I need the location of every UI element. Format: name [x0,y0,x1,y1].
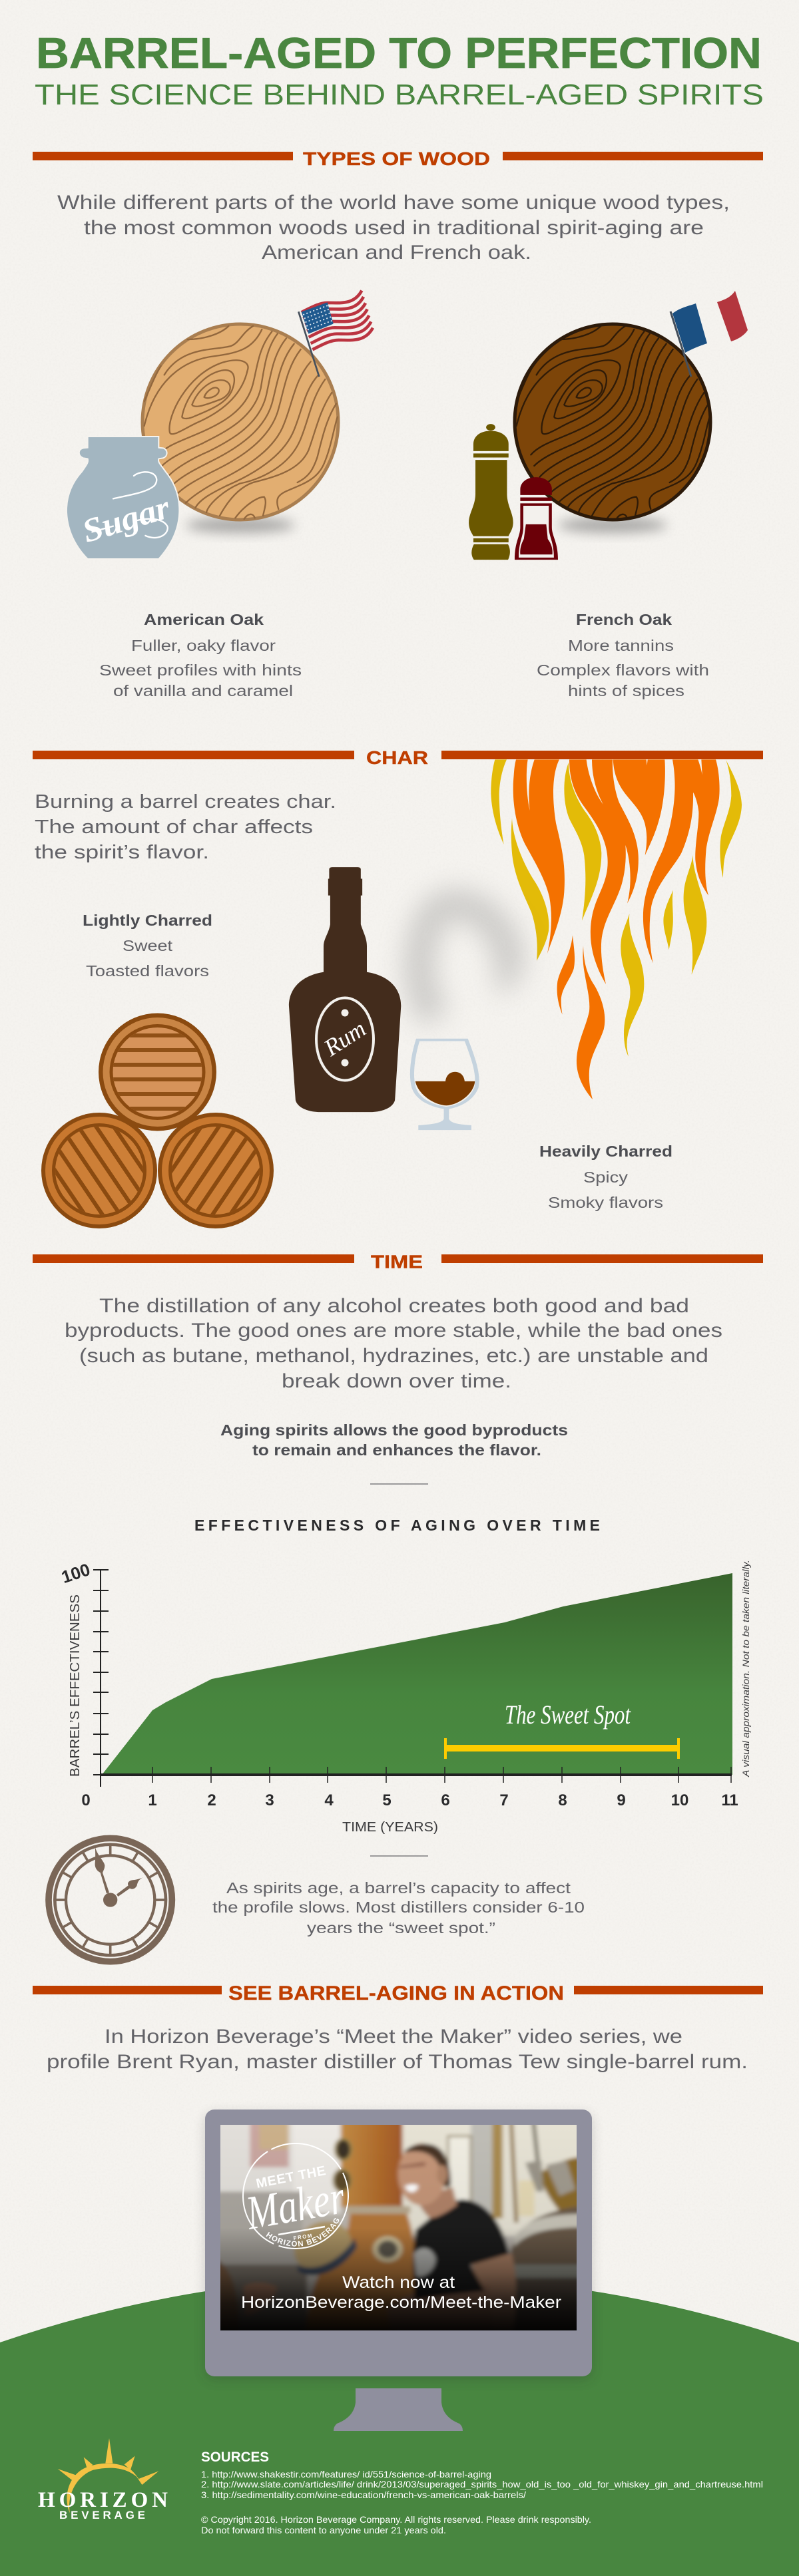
intro paragraph: wood types: While different parts of the world have some unique wood types, [57,192,730,214]
icon: sugar jar [67,437,179,559]
badge: meet the maker: FROM [293,2233,314,2241]
sources list: 1. http://www.shakestir.com/features/ id/551/science-of-barrel-aging [201,2469,491,2480]
icon: rum bottle [289,867,401,1112]
text block: american oak [99,611,302,699]
area chart: effectiveness of aging over time [59,1559,751,1835]
watch now caption: HorizonBeverage.com/Meet-the-Maker [241,2293,561,2312]
sources block [201,2450,763,2535]
x axis numbers: 9 [617,1791,626,1809]
text block: french oak: hints of spices [568,682,684,699]
paragraph: byproducts: break down over time. [282,1370,511,1392]
text block: heavily charred: Heavily Charred [539,1143,672,1160]
watch now caption: Watch now at [342,2273,455,2292]
x axis numbers: 5 [382,1791,392,1809]
text block: french oak: Complex flavors with [537,661,709,679]
text block: american oak: Fuller, oaky flavor [131,637,276,654]
chart title: EFFECTIVENESS OF AGING OVER TIME [194,1517,600,1534]
illustration: french oak round [515,324,710,533]
sources list: 2. http://www.slate.com/articles/life/ drink/2013/03/superaged_spirits_how_old_is_too _old_for_whiskey_gin_and_chartreuse.html [201,2479,763,2489]
x axis numbers: 4 [324,1791,334,1809]
x axis numbers: 7 [499,1791,509,1809]
icon: rum bottle: Rum [319,1015,371,1061]
watch now caption [241,2273,561,2312]
bold statement: aging spirits: Aging spirits allows the good byproducts [220,1421,568,1439]
intro paragraph: wood types: the most common woods used in traditional spirit-aging are [84,217,704,239]
copyright: Do not forward this content to anyone under 21 years old. [201,2525,446,2535]
bold statement: aging spirits: to remain and enhances the flavor. [252,1441,541,1459]
green hill footer background [0,2276,799,2576]
logo: horizon beverage [38,2438,168,2521]
x axis numbers: 2 [207,1791,216,1809]
section heading: types of wood [33,148,763,169]
illustration: american oak round [142,324,338,533]
x axis numbers [81,1791,738,1809]
section heading: see barrel-aging in action [33,1982,763,2004]
icon: charred left barrel [41,1113,157,1228]
text block: lightly charred: Toasted flavors [86,962,209,980]
paragraph: meet the maker intro: profile Brent Ryan, master distiller of Thomas Tew single-barrel rum. [47,2051,748,2073]
paragraph: char intro: the spirit’s flavor. [35,842,209,863]
title: BARREL-AGED TO PERFECTION [36,29,762,77]
monitor stand [334,2388,463,2431]
copyright [201,2514,591,2535]
x axis numbers: 1 [148,1791,157,1809]
disclaimer note: A visual approximation. Not to be taken literally. [740,1560,751,1777]
x axis numbers: 10 [671,1791,688,1809]
x axis numbers: 11 [721,1791,738,1809]
x axis numbers: 3 [265,1791,274,1809]
icon: pepper mill [469,424,513,560]
y axis with ticks [93,1570,109,1787]
illustration: flames [491,759,742,1099]
paragraph: sweet spot: As spirits age, a barrel’s capacity to affect [226,1879,571,1897]
subtitle: THE SCIENCE BEHIND BARREL-AGED SPIRITS [35,79,764,111]
paragraph: char intro [35,791,336,863]
monitor [200,2109,597,2431]
section heading: see barrel-aging in action: SEE BARREL-AGING IN ACTION [228,1982,564,2004]
intro paragraph: wood types: American and French oak. [262,242,531,264]
icon: sugar jar: Sugar [78,488,174,550]
sweet spot label: The Sweet Spot [505,1700,631,1730]
x axis title: TIME (YEARS) [342,1820,438,1835]
x axis numbers: 6 [441,1791,450,1809]
sweet spot range bar [444,1738,680,1759]
badge: meet the maker: MEET THE [255,2163,327,2191]
text block: lightly charred: Sweet [123,937,173,954]
text block: american oak: American Oak [144,611,264,628]
paragraph: sweet spot: years the “sweet spot.” [307,1919,495,1936]
text block: french oak [537,611,709,699]
x axis numbers: 8 [558,1791,567,1809]
text block: american oak: of vanilla and caramel [113,682,293,699]
paragraph: char intro: The amount of char affects [35,817,313,838]
badge: meet the maker [242,2143,349,2249]
logo: horizon beverage: BEVERAGE [59,2509,145,2521]
text block: heavily charred: Spicy [583,1169,629,1186]
icon: american flag [298,291,373,377]
copyright: © Copyright 2016. Horizon Beverage Company. All rights reserved. Please drink responsibly. [201,2514,591,2525]
x axis with ticks [101,1767,732,1783]
section heading: time: TIME [371,1251,423,1272]
icon: charred right barrel [158,1113,274,1228]
section heading: char [33,747,763,768]
logo: horizon beverage: HORIZON [38,2488,168,2512]
text block: lightly charred: Lightly Charred [83,912,212,929]
paragraph: char intro: Burning a barrel creates char. [35,791,336,813]
paragraph: byproducts [65,1295,722,1392]
paragraph: meet the maker intro [47,2026,748,2073]
icon: lightly charred top barrel [93,1013,220,1131]
section heading: char: CHAR [366,747,428,768]
y axis max value: 100 [59,1559,93,1587]
sources heading: SOURCES [201,2450,269,2465]
sources list [201,2469,763,2500]
paragraph: sweet spot [212,1879,585,1936]
chart area: effectiveness curve [102,1573,732,1775]
monitor body [205,2110,592,2376]
section heading: time [33,1251,763,1272]
sources list: 3. http://sedimentality.com/wine-education/french-vs-american-oak-barrels/ [201,2489,526,2500]
paragraph: byproducts: byproducts. The good ones are more stable, while the bad ones [65,1320,722,1342]
y axis title: BARREL’S EFFECTIVENESS [68,1594,83,1777]
badge: meet the maker: Maker [242,2170,349,2240]
text block: french oak: French Oak [576,611,672,628]
text block: american oak: Sweet profiles with hints [99,661,302,679]
intro paragraph: wood types [57,192,730,264]
text block: french oak: More tannins [568,637,674,654]
paragraph: sweet spot: the profile slows. Most distillers consider 6-10 [212,1899,585,1916]
video still: man in distillery [220,2125,577,2330]
paragraph: byproducts: (such as butane, methanol, hydrazines, etc.) are unstable and [79,1345,708,1367]
icon: snifter glass [412,1040,477,1130]
text block: heavily charred: Smoky flavors [548,1194,663,1211]
icon: french flag [670,291,748,377]
paragraph: byproducts: The distillation of any alcohol creates both good and bad [99,1295,689,1317]
icon: salt shaker [515,477,558,560]
x axis numbers: 0 [81,1791,91,1809]
section heading: types of wood: TYPES OF WOOD [303,148,490,169]
illustration: smoke [419,904,509,1018]
bold statement: aging spirits [220,1421,568,1459]
paragraph: meet the maker intro: In Horizon Beverage’s “Meet the Maker” video series, we [105,2026,682,2048]
badge: meet the maker: HORIZON BEVERAGE [266,2218,340,2247]
icon: clock [49,1838,172,1962]
text block: heavily charred [539,1143,672,1211]
text block: lightly charred [83,912,212,980]
